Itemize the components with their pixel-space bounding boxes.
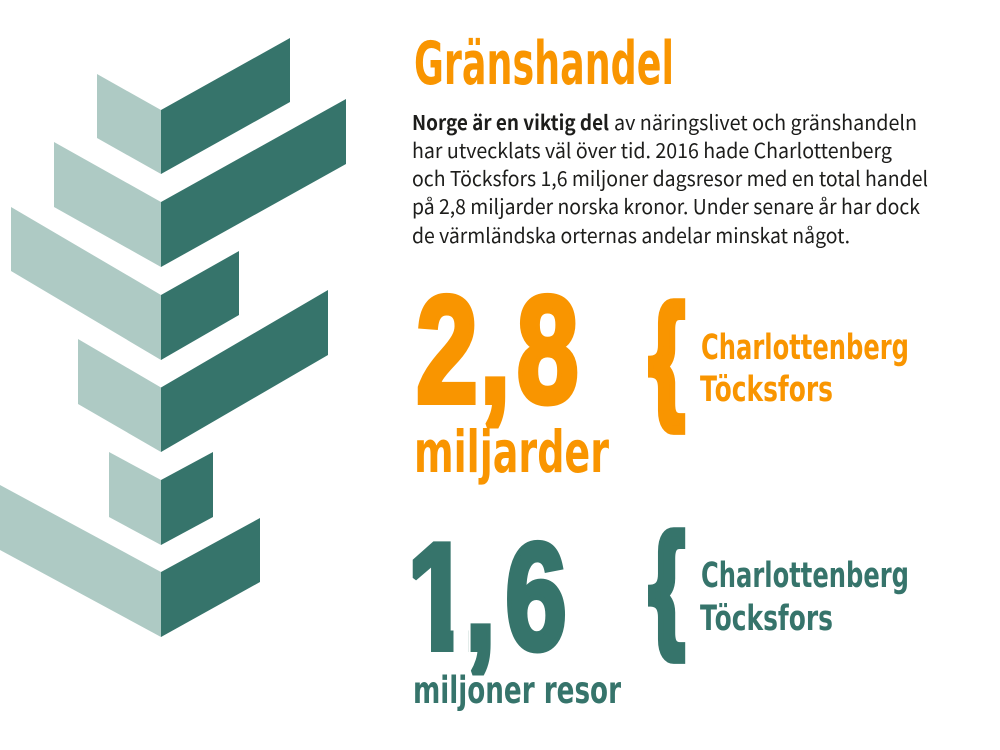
intro paragraph: och Töcksfors 1,6 miljoner dagsresor med en total handel (412, 162, 928, 192)
illustration: stacked isometric blocks (0, 38, 346, 637)
places (700, 328, 909, 410)
brace: { (650, 279, 684, 432)
intro paragraph (412, 106, 928, 249)
block 6 (0, 485, 260, 637)
stat: day trips (412, 527, 907, 711)
places: Töcksfors (700, 599, 833, 639)
brace: { (650, 508, 684, 661)
block 3 (11, 207, 239, 360)
unit: miljarder: miljarder (414, 418, 609, 486)
intro paragraph: av näringslivet och gränshandeln (614, 106, 917, 136)
big number 1,6: 1,6 (407, 513, 567, 682)
stat: trade value (414, 266, 909, 486)
block 4 (78, 290, 328, 452)
intro paragraph: på 2,8 miljarder norska kronor. Under senare år har dock (412, 190, 921, 220)
places: Charlottenberg (701, 328, 909, 368)
intro paragraph: Norge är en viktig del (412, 106, 609, 136)
block 5 (109, 452, 213, 545)
places (700, 556, 909, 639)
unit: miljoner resor: miljoner resor (413, 669, 622, 712)
block 1 (97, 38, 290, 174)
intro paragraph: de värmländska orternas andelar minskat något. (412, 219, 850, 249)
intro paragraph: har utvecklats väl över tid. 2016 hade Charlottenberg (412, 134, 892, 164)
places: Töcksfors (700, 370, 833, 410)
block 2 (54, 99, 346, 267)
places: Charlottenberg (701, 556, 909, 596)
title: Gränshandel (414, 29, 674, 99)
big number 2,8: 2,8 (416, 266, 579, 435)
